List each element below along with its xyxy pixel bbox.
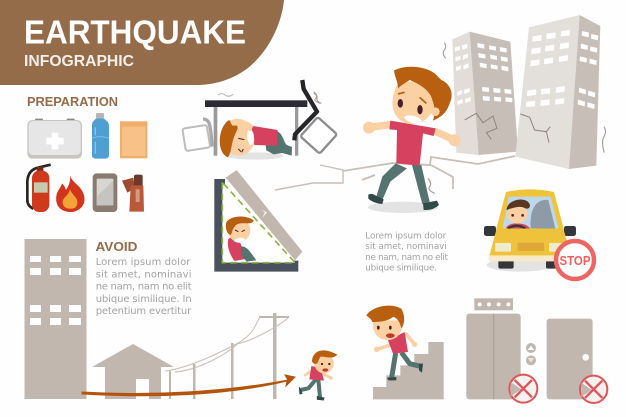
text block: avoid lorem: petentium evertitur [96, 306, 192, 317]
table [205, 94, 307, 156]
ground crack [275, 156, 515, 190]
right falling chair [294, 80, 337, 154]
text block: avoid lorem: ubique similique. In [96, 294, 192, 305]
floor indicator [474, 298, 513, 310]
panel: cracked buildings [314, 15, 605, 213]
title: EARTHQUAKE [24, 14, 246, 50]
text block: center lorem: ubique similique. [365, 263, 437, 273]
panel: avoid buildings illustration [24, 239, 295, 399]
elevator doors [466, 314, 521, 399]
icon: car with driver [484, 189, 576, 272]
panel: triangle of life shelter [214, 170, 302, 272]
stairs [373, 342, 444, 399]
tall building [24, 239, 86, 399]
boy running from earthquake [363, 67, 461, 213]
shake marks [314, 43, 605, 193]
text block: center lorem: ne nam, nam no elit [365, 253, 449, 263]
icon: stop sign [556, 241, 594, 279]
panel: use stairs [366, 298, 607, 403]
utility poles and wires [165, 313, 289, 399]
text block: center lorem: Lorem ipsum dolor [365, 232, 447, 242]
heading: avoid: AVOID [96, 239, 138, 254]
icon: food packet [120, 121, 147, 158]
text block: avoid lorem: sit amet, nominavi [96, 269, 192, 280]
text block: avoid lorem: Lorem ipsum dolor [96, 257, 191, 268]
subtitle: INFOGRAPHIC [24, 53, 134, 70]
panel: drop under table [182, 80, 337, 160]
icon: stop sign: STOP [560, 253, 591, 268]
text block: avoid lorem [96, 257, 192, 317]
text block: center lorem [365, 232, 449, 273]
icon: first aid kit [27, 119, 82, 159]
panel: preparation icons [27, 113, 147, 212]
icon: fire extinguisher [27, 165, 51, 212]
text block: avoid lorem: ne nam, nam no elit [96, 282, 192, 293]
icon: mobile phone [93, 173, 117, 212]
escape arrow [82, 375, 295, 396]
icon: water bottle [92, 113, 109, 159]
sitting boy [226, 216, 256, 262]
boy on stairs [366, 306, 423, 380]
elevator buttons [526, 343, 536, 365]
wall and floor [214, 179, 298, 272]
small running boy [299, 350, 337, 400]
title banner [0, 0, 284, 85]
icon: fire [56, 176, 85, 212]
boy sheltering under table [220, 119, 292, 160]
door [547, 319, 593, 399]
safety triangle dashes [222, 182, 295, 263]
no elevator sign [509, 375, 537, 403]
collapsed slab [226, 170, 302, 260]
icon: flashlight [122, 175, 144, 212]
building: leaning left [452, 32, 518, 155]
building: leaning right [515, 15, 600, 169]
left fallen chair [182, 119, 212, 151]
heading: preparation: PREPARATION [27, 94, 118, 109]
text block: center lorem: sit amet, nominavi [365, 242, 447, 252]
house [92, 344, 174, 399]
no door sign [580, 376, 607, 403]
